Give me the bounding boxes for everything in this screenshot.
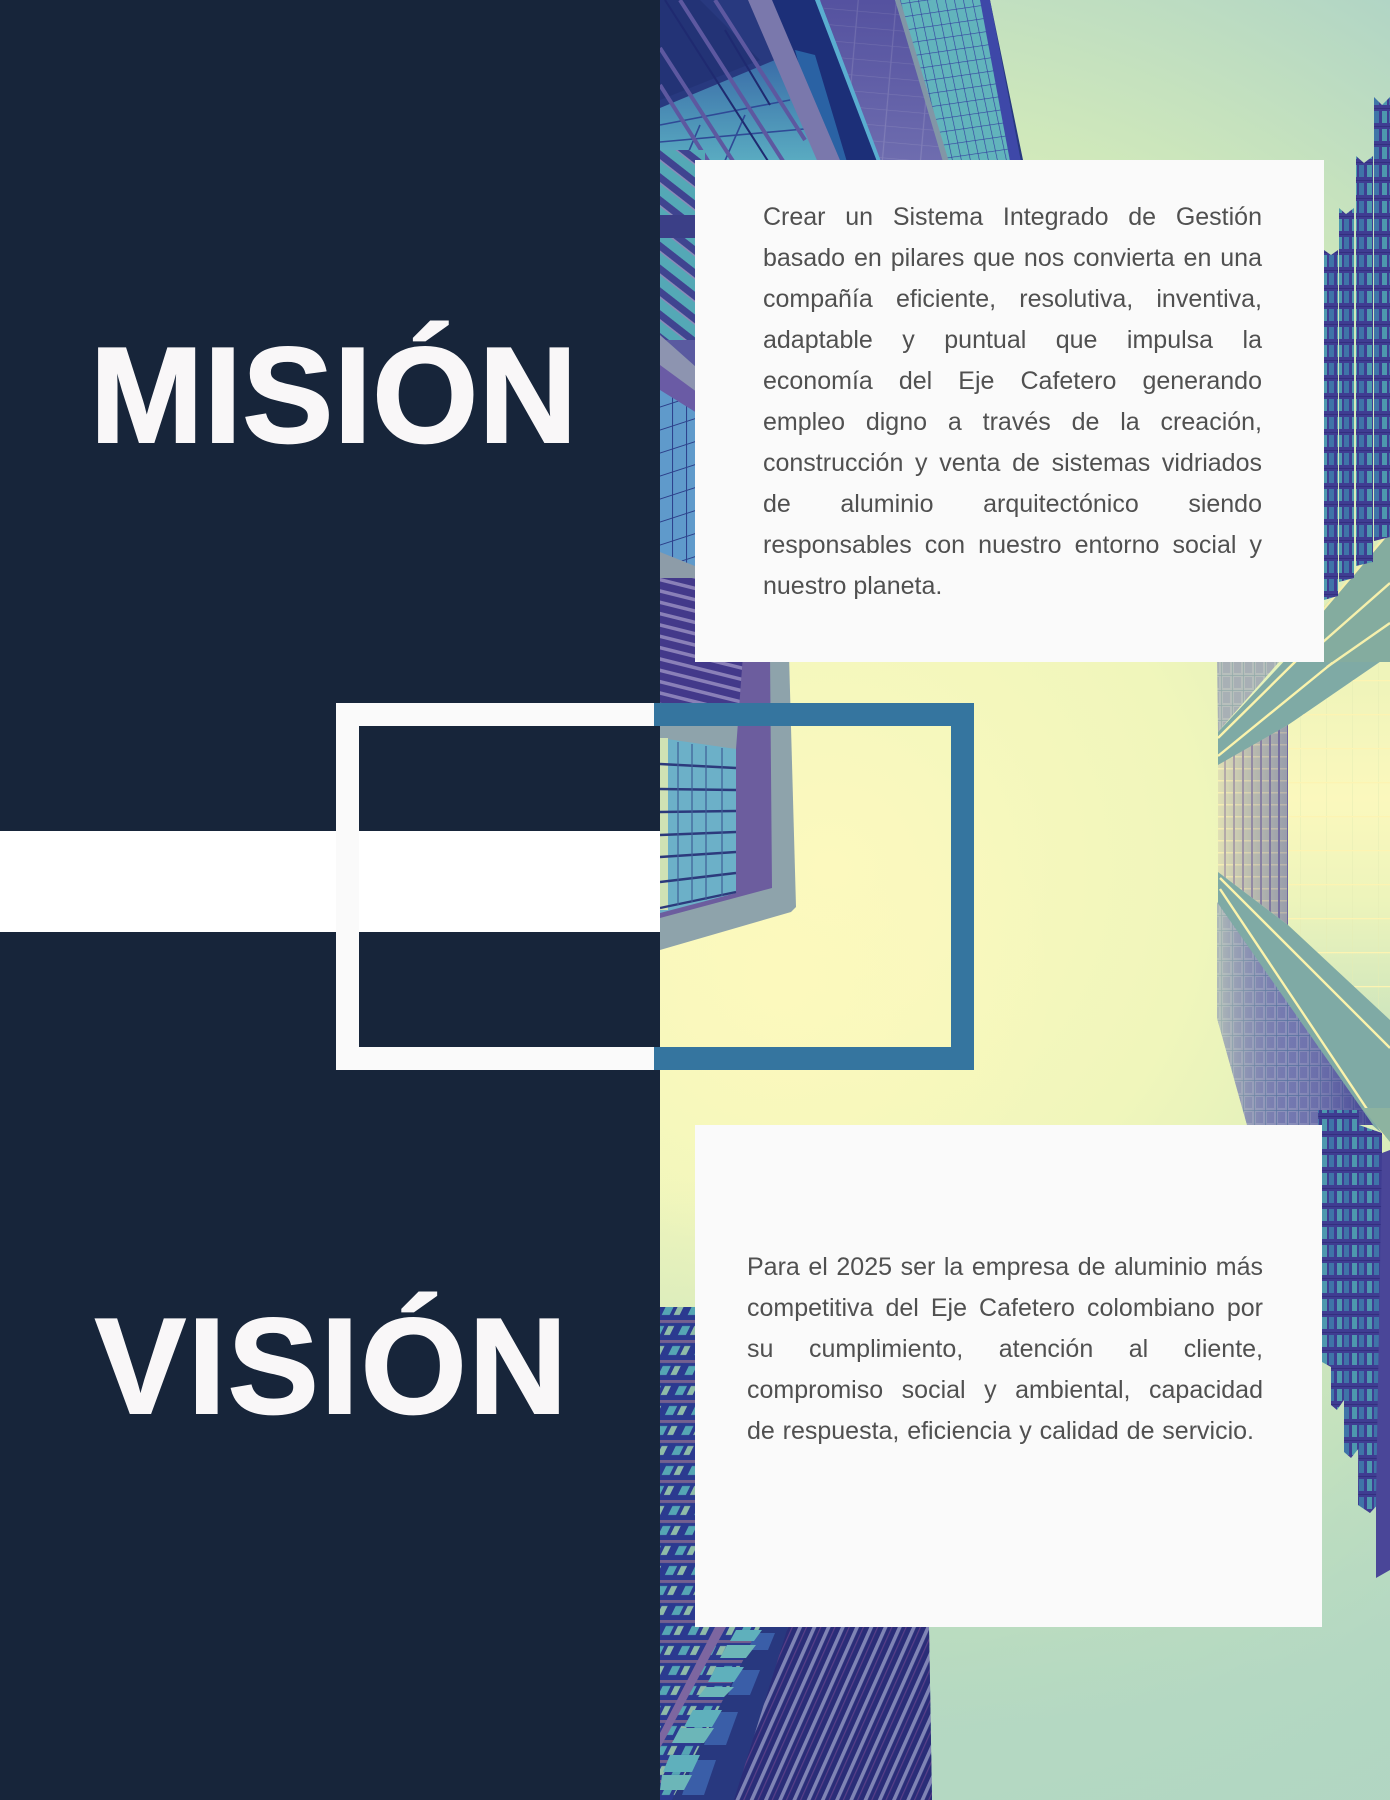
sky xyxy=(660,0,1390,1800)
text block: vision: compromiso social y ambiental, capacidad xyxy=(747,1376,1263,1404)
title: MISIÓN: MISIÓN xyxy=(90,319,578,471)
text block: mission: Crear un Sistema Integrado de Gestión xyxy=(763,203,1262,231)
panel: mission text card xyxy=(695,160,1324,662)
text block: mission: responsables con nuestro entorno social y xyxy=(763,531,1262,559)
text block: mission: compañía eficiente, resolutiva, inventiva, xyxy=(763,285,1262,313)
text block: vision: su cumplimiento, atención al cliente, xyxy=(747,1335,1263,1363)
building: bottom left tower xyxy=(660,1307,932,1800)
text block: vision: de respuesta, eficiencia y calidad de servicio. xyxy=(747,1417,1254,1445)
text block: mission: basado en pilares que nos convierta en una xyxy=(763,244,1262,272)
text block: vision: competitiva del Eje Cafetero colombiano por xyxy=(747,1294,1263,1322)
panel: vision text card xyxy=(695,1124,1322,1627)
building: central corner with window xyxy=(660,655,796,950)
navy left panel xyxy=(0,0,660,1800)
text block: mission: construcción y venta de sistemas vidriados xyxy=(763,449,1262,477)
building: upper right columns xyxy=(1323,97,1390,667)
text block: mission: economía del Eje Cafetero generando xyxy=(763,367,1262,395)
text block: mission: empleo digno a través de la creación, xyxy=(763,408,1262,436)
text block: mission: de aluminio arquitectónico siendo xyxy=(763,490,1262,518)
text block: vision: Para el 2025 ser la empresa de aluminio más xyxy=(747,1253,1263,1281)
building: top-left tower xyxy=(660,0,1023,172)
text block: mission: nuestro planeta. xyxy=(763,572,942,600)
text block: vision xyxy=(747,1253,1263,1445)
building: right tower with bright facade xyxy=(1217,655,1390,1140)
text block: mission: adaptable y puntual que impulsa la xyxy=(763,326,1262,354)
blue half frame of central square xyxy=(654,703,974,1070)
title: VISIÓN: VISIÓN xyxy=(95,1290,569,1442)
building: lower right columns xyxy=(1318,1108,1390,1578)
text block: mission xyxy=(763,203,1262,600)
white horizontal band xyxy=(0,831,660,932)
building: left strip with glass levels xyxy=(660,150,705,670)
white half frame of central square xyxy=(336,703,655,1070)
